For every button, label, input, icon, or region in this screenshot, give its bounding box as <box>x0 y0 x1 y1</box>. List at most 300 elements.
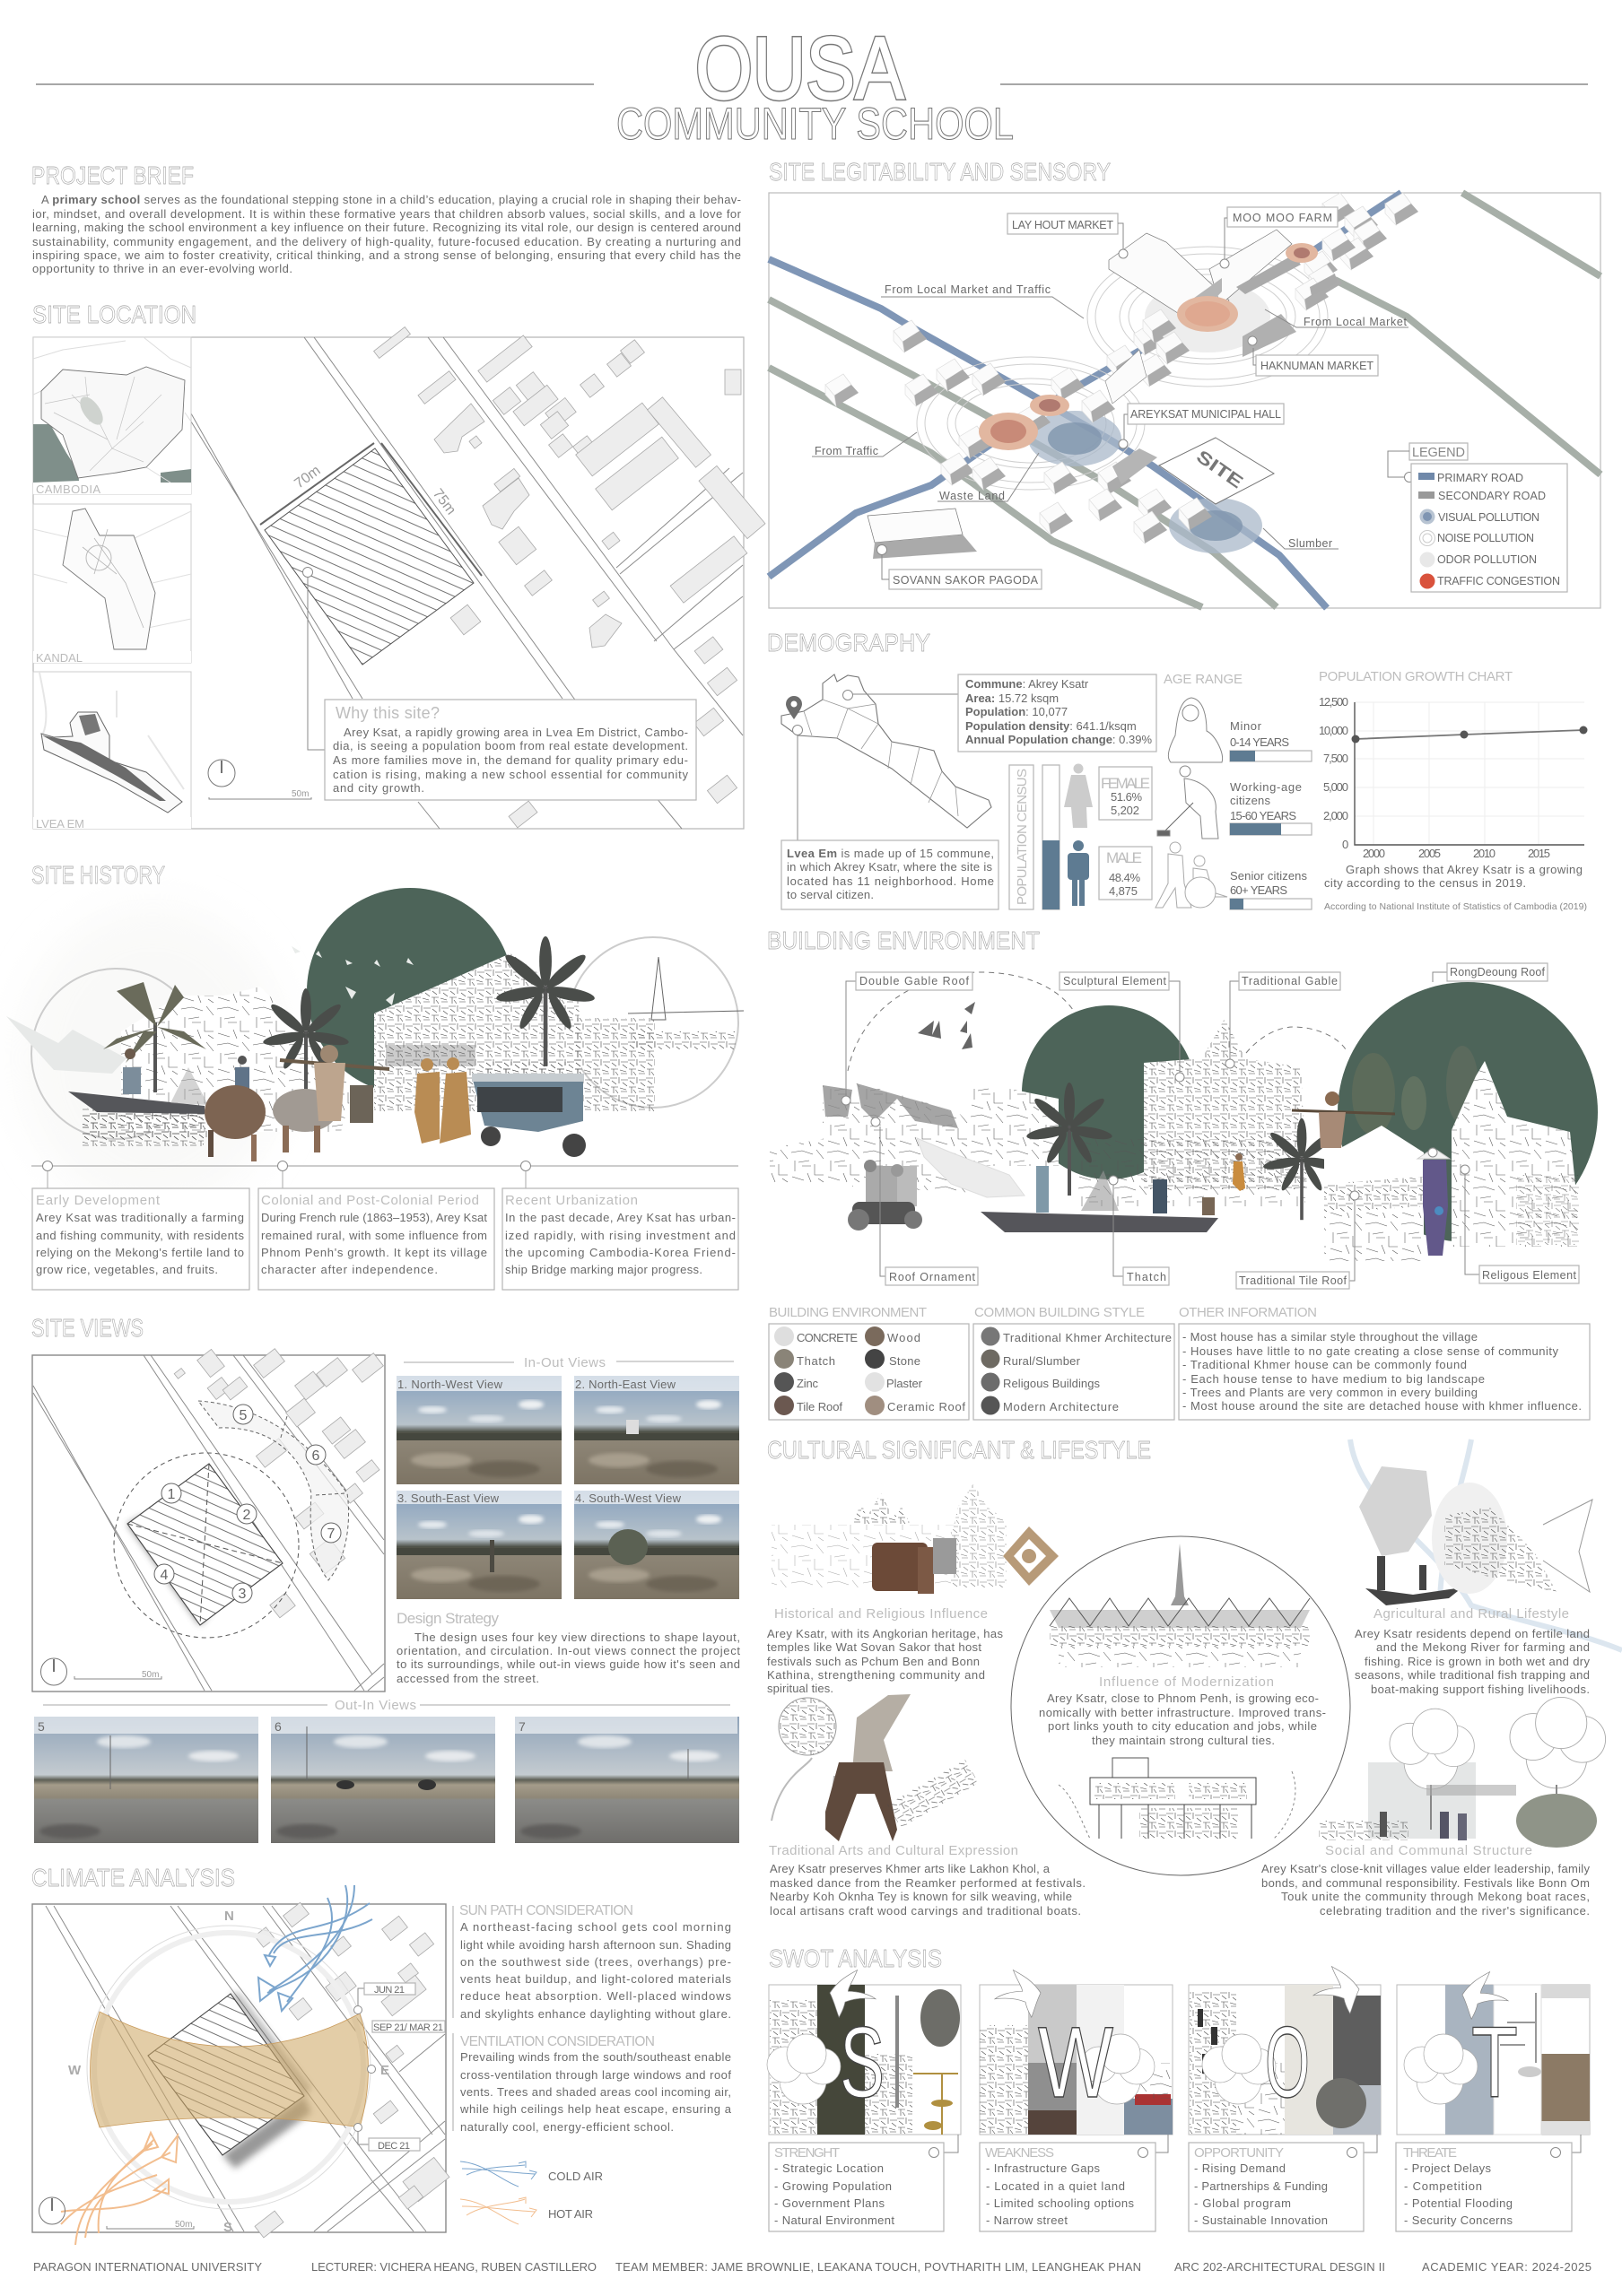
compass labels and sun path dates: SEP 21/ MAR 21 <box>373 2022 443 2033</box>
text block: modernization: they maintain strong cultural ties. <box>1092 1734 1275 1747</box>
building labels: Double Gable Roof <box>859 975 970 987</box>
swot image: strength: S <box>840 2006 885 2118</box>
photo: north-west view <box>397 1376 562 1484</box>
figure: senior <box>1155 842 1227 908</box>
text block: modernization <box>1039 1674 1326 1747</box>
legend: building style: Modern Architecture <box>1003 1400 1119 1413</box>
building labels: Thatch <box>1127 1271 1166 1283</box>
panel: swot analysis <box>767 1944 1590 2231</box>
text block: sun path: A northeast-facing school gets cool morning <box>460 1920 731 1934</box>
age range: Working-age <box>1230 780 1302 794</box>
collage: historical <box>772 1483 1059 1594</box>
text block: sun path: and skylights enhance daylighting without glare. <box>460 2007 731 2021</box>
text block: sun path: light while avoiding harsh afternoon sun. Shading <box>460 1938 731 1952</box>
text block: social: bonds, and communal responsibility. Festivals like Bonn Om <box>1261 1876 1590 1890</box>
text block: social: Social and Communal Structure <box>1325 1843 1532 1858</box>
swot list: weakness: WEAKNESS <box>985 2145 1054 2161</box>
title: OUSA <box>695 19 905 117</box>
gender figures: 48.4% <box>1109 871 1140 884</box>
site views plan <box>33 1349 384 1691</box>
age range: citizens <box>1230 794 1270 807</box>
text block: social: Arey Ksatr's close-knit villages value elder leadership, family <box>1261 1862 1590 1875</box>
panel: project brief: PROJECT BRIEF <box>31 161 194 189</box>
text block: recent urbanization: In the past decade, Arey Ksat has urban- <box>505 1211 736 1224</box>
title <box>36 19 1588 149</box>
text block: design strategy: to its surroundings, while out-in views guide how it's seen and <box>397 1657 740 1671</box>
visual pollution <box>1028 411 1262 553</box>
monks <box>414 1057 471 1144</box>
swot list: threat: - Project Delays <box>1404 2161 1491 2175</box>
hatched site with view circles: 6 <box>312 1448 320 1464</box>
text block: historical: Arey Ksatr, with its Angkorian heritage, has <box>767 1627 1003 1640</box>
collage: traditional arts <box>772 1694 979 1841</box>
info box: commune: Area: 15.72 ksqm <box>965 691 1059 705</box>
text block: ventilation <box>453 2033 732 2134</box>
swot list: opportunity: - Sustainable Innovation <box>1194 2213 1328 2227</box>
text block: historical <box>767 1606 1003 1695</box>
legend: building materials: Ceramic Roof <box>887 1400 965 1413</box>
swot list: strength: - Strategic Location <box>774 2161 884 2175</box>
text block: other information: - Each house tense to have medium to big landscape <box>1182 1372 1485 1386</box>
callout: why this site: cation is rising, making a new school essential for community <box>333 768 689 781</box>
panel: site location: SITE LOCATION <box>32 300 196 328</box>
text block: other information: - Houses have little to no gate creating a close sense of community <box>1182 1344 1559 1358</box>
photo: north-east view <box>574 1376 739 1484</box>
banana tree and palms <box>103 936 596 1101</box>
north arrow and scale: 50m <box>175 2220 192 2230</box>
text block: traditional arts: masked dance from the Reamker performed at festivals. <box>770 1876 1086 1890</box>
info box: Lvea Em: located has 11 neighborhood. Home <box>787 874 994 888</box>
text block: sun path: vents heat buildup, and light-colored materials <box>460 1972 732 1986</box>
north arrow and scale: 50m <box>142 1670 159 1680</box>
swot list: weakness: - Limited schooling options <box>986 2196 1134 2210</box>
wind legend: HOT AIR <box>548 2207 593 2221</box>
info box: commune <box>958 674 1156 752</box>
text block: design strategy: Design Strategy <box>397 1610 499 1627</box>
line chart: population growth: 5,000 <box>1323 780 1348 794</box>
panel: swot analysis: SWOT ANALYSIS <box>769 1944 942 1972</box>
swot list: opportunity: - Global program <box>1194 2196 1291 2210</box>
info box: commune: Population density: 641.1/ksqm <box>965 719 1137 733</box>
sketch houses <box>83 953 744 1139</box>
text block: agricultural: boat-making support fishing livelihoods. <box>1371 1683 1590 1696</box>
photo: view 7 <box>515 1717 739 1843</box>
text block: agricultural: and the Mekong River for farming and <box>1376 1640 1590 1654</box>
panel: cultural significant and lifestyle: CULTURAL SIGNIFICANT & LIFESTYLE <box>767 1436 1151 1464</box>
swot image: strength <box>767 1970 961 2135</box>
compass labels and sun path dates: S <box>223 2220 232 2235</box>
building labels: Traditional Tile Roof <box>1239 1274 1347 1287</box>
panel: site legibility and sensory: SITE LEGITABILITY AND SENSORY <box>769 158 1111 186</box>
site labels: MOO MOO FARM <box>1233 212 1332 224</box>
carrier figure <box>1292 1091 1395 1148</box>
panel: climate analysis <box>31 1864 732 2245</box>
line chart: population growth: 7,500 <box>1323 752 1348 765</box>
birds <box>292 946 414 1005</box>
legend: TRAFFIC CONGESTION <box>1437 575 1560 587</box>
footer credits: ACADEMIC YEAR: 2024-2025 <box>1422 2260 1591 2274</box>
text block: traditional arts: local artisans craft wood carvings and traditional boats. <box>770 1904 1081 1918</box>
text block: historical: temples like Wat Sovan Sakor that host <box>767 1640 981 1654</box>
shadow of site <box>127 1516 215 1625</box>
text block: other information: - Traditional Khmer house can be commonly found <box>1182 1358 1467 1371</box>
site marker: SITE <box>1192 447 1246 492</box>
text block: design strategy: orientation, and circulation. In-out views connect the project <box>397 1644 740 1657</box>
legend: building style: Religous Buildings <box>1003 1377 1100 1390</box>
center circle: modernization <box>1011 1536 1350 1875</box>
site labels: Waste Land <box>939 490 1005 502</box>
legend: building materials: BUILDING ENVIRONMENT <box>769 1305 927 1320</box>
drawing: pavilion <box>1050 1544 1310 1667</box>
text block: design strategy <box>397 1610 740 1685</box>
panel: project brief: learning, making the school environment a key influence on their future. Recognizing its vital role, our design is centered around <box>32 221 741 234</box>
legend: building materials: Tile Roof <box>797 1400 842 1413</box>
out-in views heading: Out-In Views <box>335 1698 416 1713</box>
building labels: RongDeoung Roof <box>1450 966 1546 978</box>
text block: colonial period: character after independence. <box>261 1263 438 1276</box>
green circles <box>1022 982 1598 1242</box>
age range: AGE RANGE <box>1164 672 1243 687</box>
info box: commune: Commune: Akrey Ksatr <box>965 677 1089 691</box>
line chart: population growth <box>1319 669 1588 912</box>
photo: north-east view: 2. North-East View <box>575 1378 676 1391</box>
population census bar: POPULATION CENSUS <box>1015 769 1030 905</box>
site labels <box>812 207 1408 589</box>
north arrow and scale <box>208 760 311 799</box>
site labels: From Local Market <box>1304 316 1408 328</box>
age range: 0-14 YEARS <box>1230 735 1289 749</box>
tuk tuk <box>472 1062 586 1157</box>
age range: Senior citizens <box>1230 869 1308 883</box>
compass labels and sun path dates: N <box>224 1909 234 1924</box>
site parcel hatch <box>265 448 474 665</box>
text block: other information: OTHER INFORMATION <box>1179 1305 1317 1320</box>
info box: Lvea Em: Lvea Em is made up of 15 commune, <box>787 847 994 860</box>
swot list: weakness: - Located in a quiet land <box>986 2179 1125 2193</box>
commune map <box>781 674 991 840</box>
cold air arrows <box>258 1885 372 2011</box>
tile house sketch <box>1324 1126 1424 1261</box>
panel: site history collage <box>6 861 744 1290</box>
sail, motorbike and boat <box>848 1138 1218 1232</box>
compass labels and sun path dates: DEC 21 <box>378 2141 410 2152</box>
building labels: Sculptural Element <box>1063 975 1167 987</box>
callout: why this site: As more families move in, the demand for quality primary edu- <box>333 753 688 767</box>
text block: ventilation: naturally cool, energy-efficient school. <box>460 2120 674 2134</box>
line chart: population growth: 2010 <box>1473 847 1496 860</box>
swot list: strength: - Government Plans <box>774 2196 885 2210</box>
text block: early development: and fishing community, with residents <box>36 1229 244 1242</box>
footer credits: PARAGON INTERNATIONAL UNIVERSITY <box>33 2260 262 2274</box>
text block: historical: Historical and Religious Influence <box>774 1606 988 1622</box>
hatched site with view circles: 2 <box>243 1508 251 1523</box>
legend: building style: Traditional Khmer Architecture <box>1003 1331 1172 1344</box>
text block: recent urbanization: ship Bridge marking major progress. <box>505 1263 702 1276</box>
photo: view 6: 6 <box>275 1719 282 1734</box>
trees and palm <box>1025 1046 1478 1220</box>
text block: early development: relying on the Mekong's fertile land to <box>36 1246 244 1259</box>
text block: other information: - Trees and Plants are very common in every building <box>1182 1386 1478 1399</box>
text block: ventilation: Prevailing winds from the south/southeast enable <box>460 2050 731 2064</box>
compass labels and sun path dates: E <box>380 2063 389 2078</box>
hatched site with view circles: 3 <box>239 1587 247 1602</box>
climate map roads and buildings <box>46 1902 449 2238</box>
gender figures: MALE <box>1106 849 1142 866</box>
gender figures: FEMALE <box>1101 775 1150 792</box>
age range: 60+ YEARS <box>1230 883 1287 897</box>
legend: building materials <box>769 1305 969 1420</box>
dimension labels: 75m <box>430 486 458 517</box>
legend: building style <box>973 1305 1174 1420</box>
swot image: threat <box>1397 1971 1590 2135</box>
swot list: strength: - Natural Environment <box>774 2213 894 2227</box>
timeline <box>31 1161 738 1188</box>
line chart: population growth: 2015 <box>1528 847 1550 860</box>
panel: project brief: ior, mindset, and overall development. It is within these formative years that children absorb values, social skills, and a love for <box>32 207 742 221</box>
callout: why this site <box>303 567 696 800</box>
photo: south-west view: 4. South-West View <box>575 1492 682 1505</box>
building labels <box>842 963 1579 1289</box>
inset map: Lvea Em: LVEA EM <box>36 817 84 831</box>
dashed arcs <box>848 972 1346 1071</box>
figure: working-age <box>1157 766 1218 839</box>
dimension labels <box>260 443 482 576</box>
wind legend <box>460 2161 603 2224</box>
legend: LEGEND <box>1412 446 1465 460</box>
text block: social: Touk unite the community through Mekong boat races, <box>1281 1890 1590 1903</box>
text block: social: celebrating tradition and the river's significance. <box>1320 1904 1590 1918</box>
swot image: opportunity: O <box>1265 2006 1310 2118</box>
swot list: strength: STRENGHT <box>774 2145 840 2161</box>
gender figures: 51.6% <box>1111 790 1142 804</box>
panel: site views <box>31 1314 740 1843</box>
panel: cultural significant and lifestyle <box>767 1436 1622 1918</box>
oxen and carrier <box>205 1045 389 1161</box>
swot image: opportunity <box>1189 1966 1381 2135</box>
inset map: Cambodia <box>33 337 191 496</box>
legend: PRIMARY ROAD <box>1437 472 1523 484</box>
swot list: threat: - Security Concerns <box>1404 2213 1513 2227</box>
hatched site with view circles: 1 <box>168 1487 176 1502</box>
line chart: population growth: 2000 <box>1363 847 1385 860</box>
figure: minor <box>1168 698 1223 762</box>
compass labels and sun path dates: W <box>68 2063 82 2078</box>
callout: why this site: Arey Ksat, a rapidly growing area in Lvea Em District, Cambo- <box>344 726 688 739</box>
monk figure <box>1233 1153 1245 1191</box>
text block: recent urbanization: the upcoming Cambodia-Korea Friend- <box>505 1246 736 1259</box>
text block: early development: Early Development <box>36 1193 161 1208</box>
text block: modernization: Influence of Modernization <box>1099 1674 1274 1690</box>
callout: why this site: and city growth. <box>333 781 424 795</box>
text block: agricultural: Arey Ksatr residents depend on fertile land <box>1355 1627 1590 1640</box>
text block: sun path <box>453 1903 732 2021</box>
birds <box>918 1002 975 1049</box>
building labels: Religous Element <box>1482 1269 1577 1282</box>
gender figures: 4,875 <box>1109 884 1138 898</box>
text block: social <box>1261 1843 1590 1918</box>
hatched site <box>148 1993 311 2169</box>
panel: site location <box>32 300 765 831</box>
photo: south-east view: 3. South-East View <box>397 1492 500 1505</box>
house sketches <box>770 1081 1059 1193</box>
gender figures <box>1064 764 1152 906</box>
text block: agricultural: Agricultural and Rural Lifestyle <box>1373 1606 1569 1622</box>
text block: ventilation: VENTILATION CONSIDERATION <box>460 2034 655 2049</box>
site labels: Slumber <box>1288 537 1332 550</box>
text block: design strategy: accessed from the street. <box>397 1672 539 1685</box>
legend: building style: COMMON BUILDING STYLE <box>974 1305 1145 1320</box>
roads <box>769 193 1600 608</box>
line chart: population growth: 0 <box>1342 838 1348 851</box>
info box: commune: Annual Population change: 0.39% <box>965 733 1152 746</box>
north arrow and scale <box>39 2197 194 2230</box>
north arrow and scale <box>41 1658 161 1685</box>
photo: view 5: 5 <box>38 1719 45 1734</box>
swot image: weakness <box>980 1970 1173 2135</box>
panel: building environment <box>767 926 1598 1420</box>
text block: colonial period: Phnom Penh's growth. It kept its village <box>261 1246 487 1259</box>
text block: traditional arts: Arey Ksatr preserves Khmer arts like Lakhon Khol, a <box>770 1862 1051 1875</box>
swot list: weakness: - Narrow street <box>986 2213 1068 2227</box>
footer credits: LECTURER: VICHERA HEANG, RUBEN CASTILLERO <box>311 2260 597 2274</box>
text block: modernization: port links youth to city education and jobs, while <box>1048 1719 1317 1733</box>
hatched site with view circles: 5 <box>240 1408 248 1423</box>
compass labels and sun path dates: JUN 21 <box>374 1985 405 1996</box>
site marker <box>1159 438 1274 504</box>
pagoda building <box>868 509 977 559</box>
title: COMMUNITY SCHOOL <box>616 99 1014 149</box>
text block: modernization: Arey Ksatr, close to Phnom Penh, is growing eco- <box>1047 1692 1319 1705</box>
line chart: population growth: 12,500 <box>1319 695 1348 709</box>
site labels: LAY HOUT MARKET <box>1012 219 1113 231</box>
text block: recent urbanization <box>502 1188 738 1290</box>
line chart: population growth: 10,000 <box>1319 724 1348 737</box>
text block: traditional arts: Traditional Arts and Cultural Expression <box>769 1843 1018 1858</box>
legend: VISUAL POLLUTION <box>1438 511 1539 524</box>
swot list: opportunity: OPPORTUNITY <box>1194 2145 1284 2161</box>
outline circles <box>31 937 738 1139</box>
text block: agricultural <box>1355 1606 1590 1696</box>
swot list: strength <box>769 2135 958 2231</box>
compass labels and sun path dates <box>68 1909 445 2235</box>
swot image: threat: T <box>1471 2006 1518 2118</box>
panel: project brief: inspiring space, we aim to foster creativity, critical thinking, and a strong sense of belonging, ensuring that every child has the <box>32 248 741 262</box>
info box: Lvea Em: in which Akrey Ksatr, where the site is <box>787 860 992 874</box>
line chart: population growth: POPULATION GROWTH CHART <box>1319 669 1513 684</box>
footer credits: ARC 202-ARCHITECTURAL DESGIN II <box>1174 2260 1385 2274</box>
swot list: opportunity: - Partnerships & Funding <box>1194 2179 1328 2193</box>
text block: sun path: SUN PATH CONSIDERATION <box>459 1903 633 1918</box>
text block: sun path: on the southwest side (trees, overhangs) pre- <box>460 1955 731 1969</box>
swot list: threat: THREATE <box>1403 2145 1457 2161</box>
text block: colonial period: remained rural, with some influence from <box>261 1229 487 1242</box>
dimension labels: 70m <box>292 463 324 491</box>
legend: building materials: Zinc <box>797 1377 818 1390</box>
panel: project brief: opportunity to thrive in an ever-evolving world. <box>32 262 292 275</box>
church sketch <box>1452 1061 1582 1247</box>
text block: ventilation: while high ceilings help heat escape, ensuring a <box>459 2102 732 2116</box>
text block: colonial period: During French rule (1863–1953), Arey Ksat <box>261 1211 487 1224</box>
text block: recent urbanization: Recent Urbanization <box>505 1193 638 1208</box>
boat with fisherman <box>68 1048 249 1146</box>
gender figures: 5,202 <box>1111 804 1139 817</box>
text block: traditional arts <box>769 1843 1086 1918</box>
text block: early development: Arey Ksat was traditionally a farming <box>36 1211 244 1224</box>
callout: why this site: dia, is seeing a population boom from real estate development. <box>333 739 688 752</box>
river lines <box>1350 1439 1622 1650</box>
swot list: opportunity: - Rising Demand <box>1194 2161 1286 2175</box>
text block: modernization: nomically with better infrastructure. Improved trans- <box>1039 1706 1326 1719</box>
panel: climate analysis: CLIMATE ANALYSIS <box>31 1864 235 1892</box>
legend: NOISE POLLUTION <box>1437 532 1534 544</box>
traffic congestion spots <box>979 243 1318 450</box>
legend: building materials: Plaster <box>886 1377 923 1390</box>
footer credits <box>33 2260 1591 2274</box>
panel: demography: DEMOGRAPHY <box>767 629 930 657</box>
legend: building materials: Stone <box>889 1354 920 1368</box>
market buildings <box>1105 230 1337 484</box>
info box: commune: Population: 10,077 <box>965 705 1068 718</box>
callout: why this site: Why this site? <box>336 704 440 722</box>
sensory rings <box>917 247 1328 490</box>
inset map: Kandal <box>33 504 191 665</box>
text block: agricultural: fishing. Rice is grown in both wet and dry <box>1365 1655 1590 1668</box>
panel: building environment: BUILDING ENVIRONMENT <box>767 926 1040 954</box>
site labels: SOVANN SAKOR PAGODA <box>893 574 1039 587</box>
hatched site with view circles <box>114 1405 341 1638</box>
info box: Lvea Em: to serval citizen. <box>787 888 874 901</box>
site labels: AREYKSAT MUNICIPAL HALL <box>1130 408 1281 421</box>
in-out views heading: In-Out Views <box>524 1355 606 1370</box>
text block: traditional arts: Nearby Koh Oknha Tey is known for silk weaving, while <box>770 1890 1072 1903</box>
drawing: modern villa <box>1059 1758 1295 1839</box>
photo: south-east view <box>397 1491 562 1599</box>
hatched site with view circles: 7 <box>327 1526 336 1542</box>
line chart: population growth: Graph shows that Akrey Ksatr is a growing <box>1346 863 1583 876</box>
photo: south-west view <box>574 1491 739 1599</box>
text block: early development: grow rice, vegetables, and fruits. <box>36 1263 218 1276</box>
text block: agricultural: seasons, while traditional fish trapping and <box>1355 1668 1590 1682</box>
legend <box>1388 443 1567 592</box>
legend: building materials: Wood <box>887 1331 920 1344</box>
swot list: threat <box>1396 2135 1581 2231</box>
swot list: weakness: - Infrastructure Gaps <box>986 2161 1100 2175</box>
inset map: Lvea Em <box>33 672 191 831</box>
population census bar <box>1009 765 1060 909</box>
text block: historical: Kathina, strengthening community and <box>767 1668 985 1682</box>
panel: site legibility and sensory <box>769 158 1600 608</box>
building labels: Roof Ornament <box>889 1271 976 1283</box>
compass circle <box>87 1926 371 2209</box>
photo: view 6 <box>271 1717 495 1843</box>
title: OUSA <box>695 19 905 117</box>
line chart: population growth: 2,000 <box>1323 809 1348 822</box>
line chart: population growth: city according to the census in 2019. <box>1324 876 1526 890</box>
text block: early development <box>32 1188 249 1290</box>
site labels: HAKNUMAN MARKET <box>1260 360 1373 372</box>
swot list: strength: - Growing Population <box>774 2179 892 2193</box>
text block: other information <box>1179 1305 1590 1420</box>
photo: view 7: 7 <box>519 1719 526 1734</box>
panel: project brief: sustainability, community engagement, and the delivery of high-quality, future-focused education. By creating a nurturing and <box>32 235 741 248</box>
panel: demography <box>767 629 1588 912</box>
age range: 15-60 YEARS <box>1230 809 1296 822</box>
site labels: From Traffic <box>815 445 878 457</box>
text block: other information: - Most house has a similar style throughout the village <box>1182 1330 1478 1344</box>
text block: design strategy: The design uses four key view directions to shape layout, <box>414 1631 740 1644</box>
text block: sun path: reduce heat absorption. Well-placed windows <box>460 1989 732 2003</box>
info box: Lvea Em <box>781 840 998 909</box>
